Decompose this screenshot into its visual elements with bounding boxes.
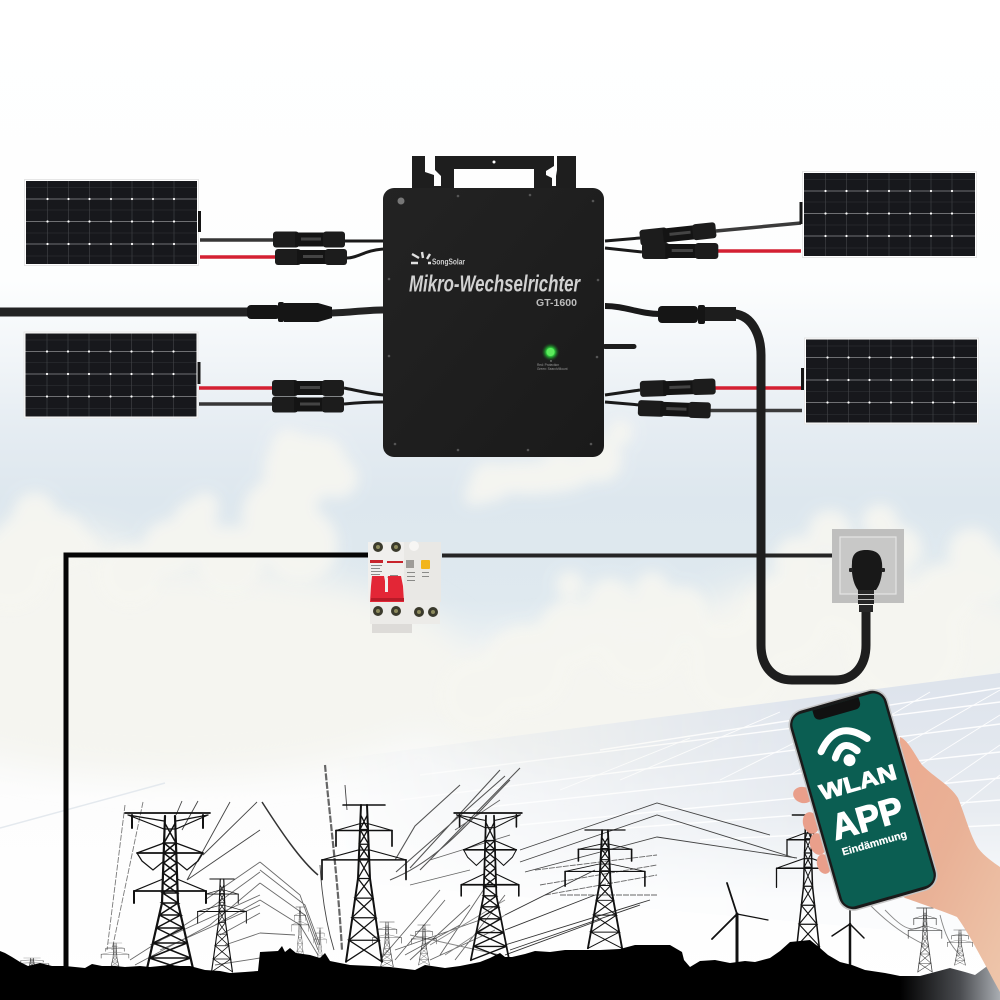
clouds (0, 419, 1000, 775)
tower 3 (322, 805, 406, 962)
status LED (542, 343, 560, 362)
solar panel top left (24, 180, 198, 266)
faint wire streak (0, 783, 165, 828)
AC connector left (247, 302, 332, 322)
solar panel top right (802, 172, 976, 258)
notch (812, 697, 862, 721)
wifi icon (817, 725, 873, 773)
MC4 connectors left (272, 232, 347, 412)
screws (388, 194, 599, 451)
tower 6 (776, 815, 840, 967)
cables left side (0, 240, 384, 404)
APP label: APP (826, 788, 908, 848)
red switch (370, 576, 404, 602)
LED legend (537, 363, 568, 371)
circuit breaker (368, 541, 441, 633)
brand logo: SongSolar (432, 258, 465, 266)
solar array background (516, 673, 1000, 875)
tower 4 (454, 813, 522, 960)
plug (849, 550, 885, 612)
tower 1 (125, 813, 210, 973)
power lines (107, 765, 960, 965)
model: GT-1600 (536, 297, 577, 309)
LED legend: Green: Search/Mount (537, 367, 568, 371)
panel junction boxes (199, 202, 802, 390)
tower 2 (198, 879, 246, 972)
tower 5 (565, 830, 645, 948)
ground silhouette (0, 940, 1000, 1000)
AC cable over lower wires (756, 355, 766, 430)
wall socket (832, 529, 904, 603)
brand logo (411, 252, 465, 266)
fingers (791, 785, 833, 875)
solar panel bottom left (24, 332, 198, 418)
solar panel bottom right (804, 338, 978, 424)
LED legend: Red: Protection (537, 363, 559, 367)
wind turbine 2 (832, 908, 864, 975)
product title: Mikro-Wechselrichter (409, 270, 581, 296)
inverter body (383, 188, 604, 457)
cables right side (605, 223, 802, 410)
micro inverter (383, 156, 604, 457)
hand (791, 737, 1000, 992)
Eindämmung label: Eindämmung (841, 829, 908, 859)
AC connector right (658, 305, 736, 324)
power towers (15, 805, 973, 975)
WLAN label: WLAN (816, 759, 899, 805)
smartphone (785, 685, 941, 915)
mounting bracket (412, 156, 576, 190)
screen (790, 691, 936, 909)
AC power cable to socket (700, 314, 866, 680)
black grid wire (66, 555, 832, 968)
small distant towers (15, 907, 973, 975)
MC4 connectors right (638, 222, 718, 419)
wind turbine 1 (712, 883, 768, 965)
